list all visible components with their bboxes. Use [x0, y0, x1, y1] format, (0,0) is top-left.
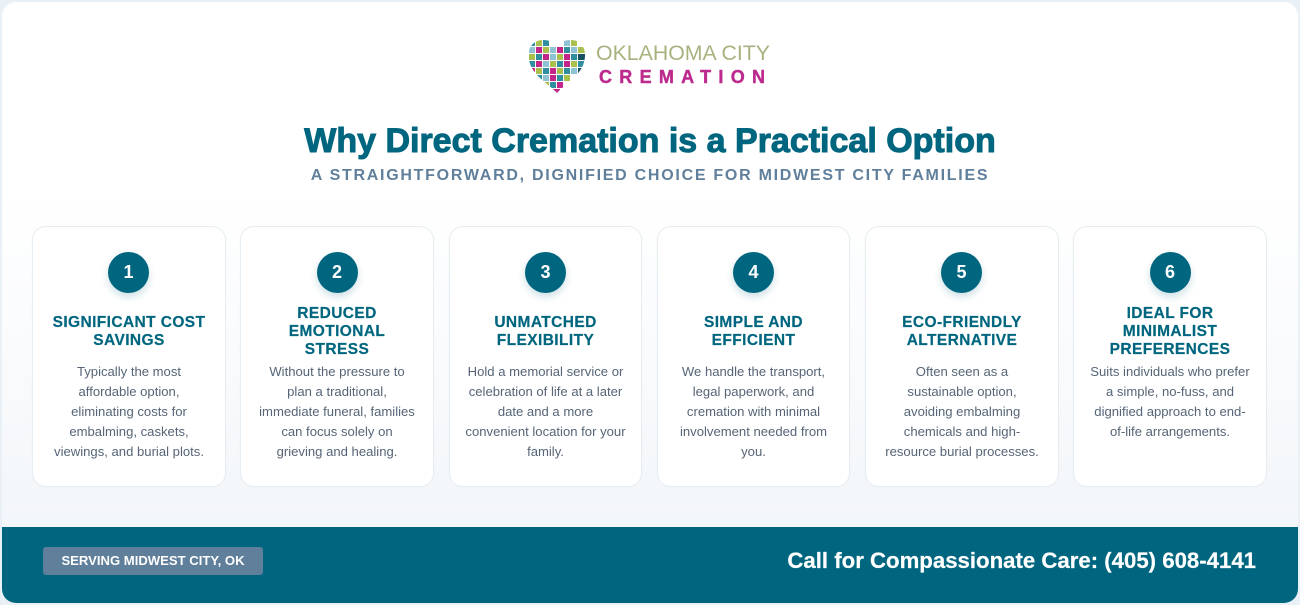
heading: UNMATCHED [494, 314, 597, 331]
heading [289, 305, 385, 358]
body text: date and a more [498, 404, 593, 419]
heading: SIGNIFICANT COST [53, 314, 205, 331]
body text: cremation with minimal [687, 404, 820, 419]
number badge 5: 5 [956, 262, 966, 282]
number badge 4 [733, 252, 774, 293]
service area badge [43, 547, 263, 575]
heading: SIMPLE AND [704, 314, 803, 331]
body text: legal paperwork, and [693, 384, 814, 399]
heading [704, 314, 803, 349]
body text: chemicals and high- [904, 424, 1020, 439]
body text: dignified approach to end- [1094, 404, 1246, 419]
panel: card 1 cost savings [32, 226, 226, 487]
panel: card 5 eco-friendly [865, 226, 1059, 487]
heading: ALTERNATIVE [907, 332, 1017, 349]
call to action phone number: Call for Compassionate Care: (405) 608-4141 [787, 548, 1256, 573]
logo wordmark top line: OKLAHOMA CITY [596, 41, 770, 65]
body text: eliminating costs for [71, 404, 187, 419]
number badge 3 [525, 252, 566, 293]
logo: Oklahoma City Cremation [529, 40, 770, 93]
number badge 1: 1 [123, 262, 134, 282]
body text: grieving and healing. [277, 444, 397, 459]
panel: card 6 minimalist preferences [1073, 226, 1267, 487]
service area badge: SERVING MIDWEST CITY, OK [61, 553, 245, 568]
body text [885, 364, 1039, 459]
body text [465, 364, 626, 459]
footer band [2, 527, 1298, 603]
heading: PREFERENCES [1110, 341, 1230, 358]
body text: Hold a memorial service or [468, 364, 623, 379]
heading: ECO-FRIENDLY [902, 314, 1022, 331]
heading [53, 314, 205, 349]
body text: family. [527, 444, 564, 459]
body text: involvement needed from [680, 424, 827, 439]
title: Why Direct Cremation is a Practical Option [304, 122, 996, 160]
icon: mosaic heart [529, 40, 585, 94]
body text: convenient location for your [465, 424, 626, 439]
body text: Often seen as a [916, 364, 1008, 379]
heading: MINIMALIST [1123, 323, 1217, 340]
body text: you. [741, 444, 766, 459]
body text: viewings, and burial plots. [54, 444, 204, 459]
subtitle: A STRAIGHTFORWARD, DIGNIFIED CHOICE FOR MIDWEST CITY FAMILIES [311, 167, 989, 184]
heading [1110, 305, 1230, 358]
body text: can focus solely on [281, 424, 393, 439]
heading: REDUCED [297, 305, 377, 322]
body text: of-life arrangements. [1110, 424, 1230, 439]
heading: SAVINGS [93, 332, 165, 349]
number badge 4: 4 [748, 262, 758, 282]
heading: FLEXIBILITY [497, 332, 594, 349]
body text: plan a traditional, [287, 384, 387, 399]
body text: embalming, caskets, [69, 424, 189, 439]
body text [1090, 364, 1250, 439]
number badge 6 [1150, 252, 1190, 293]
number badge 6: 6 [1165, 262, 1175, 282]
body text: celebration of life at a later [469, 384, 622, 399]
body text [680, 364, 827, 459]
body text: affordable option, [79, 384, 179, 399]
heading: STRESS [305, 341, 369, 358]
number badge 2 [316, 252, 358, 293]
body text [259, 364, 415, 459]
body text: Suits individuals who prefer [1090, 364, 1250, 379]
panel: card 2 emotional stress [240, 226, 434, 487]
number badge 1 [108, 252, 149, 293]
body text: a simple, no-fuss, and [1106, 384, 1234, 399]
number badge 5 [941, 252, 982, 293]
heading [902, 314, 1022, 349]
number badge 3: 3 [540, 262, 550, 282]
body text: resource burial processes. [885, 444, 1039, 459]
panel: card 4 simple and efficient [657, 226, 850, 487]
body text: sustainable option, [907, 384, 1017, 399]
heading: IDEAL FOR [1127, 305, 1213, 322]
body text [54, 364, 204, 459]
heading: EMOTIONAL [289, 323, 385, 340]
body text: We handle the transport, [682, 364, 825, 379]
heading: EFFICIENT [712, 332, 795, 349]
body text: immediate funeral, families [259, 404, 415, 419]
body text: Without the pressure to [269, 364, 405, 379]
body text: avoiding embalming [904, 404, 1020, 419]
number badge 2: 2 [332, 262, 342, 282]
body text: Typically the most [77, 364, 181, 379]
heading [494, 314, 597, 349]
panel: card 3 flexibility [449, 226, 642, 487]
logo wordmark bottom line: CREMATION [599, 67, 765, 87]
